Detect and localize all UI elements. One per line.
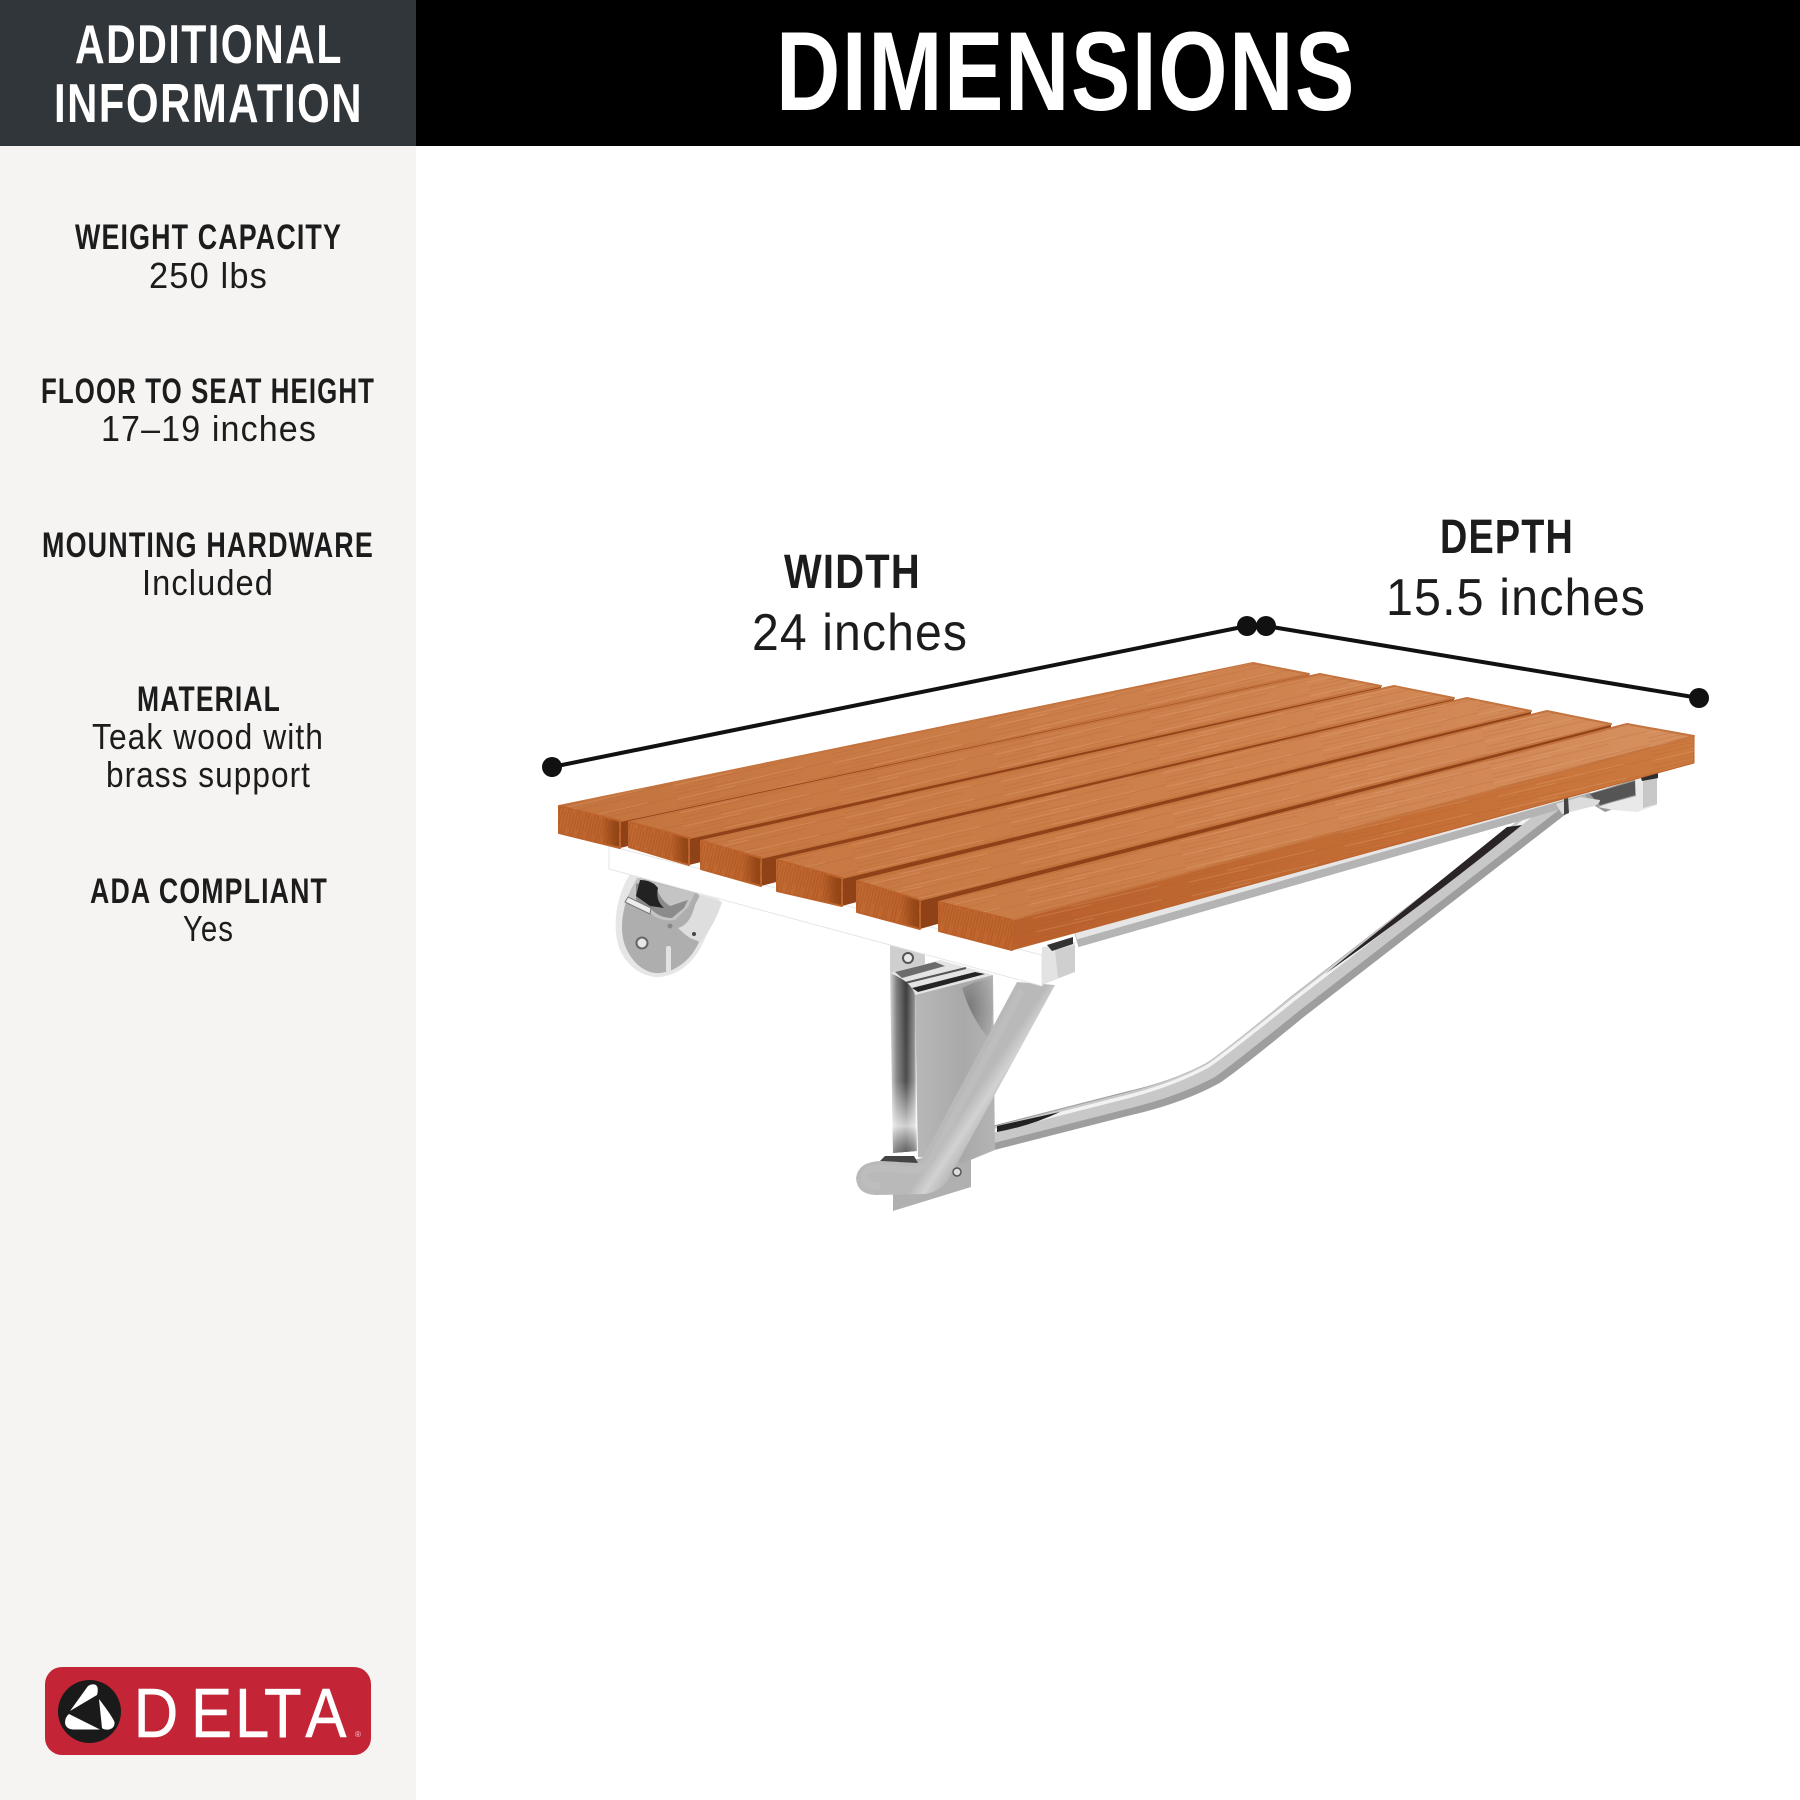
under-seat rail <box>1076 789 1590 938</box>
white seat frame <box>609 846 1075 986</box>
depth value: 15.5 inches <box>1386 569 1646 627</box>
spec: floor to seat height: 17–19 inches <box>101 408 317 449</box>
wall mount left <box>616 870 722 977</box>
teak slats <box>559 663 1694 950</box>
spec: weight capacity <box>75 218 342 296</box>
depth line <box>1256 616 1709 708</box>
bracket face <box>915 975 995 1163</box>
spec: floor to seat height <box>41 372 375 449</box>
slat 4 <box>777 698 1531 906</box>
sidebar heading: INFORMATION <box>54 72 363 134</box>
spec: mounting hardware: Included <box>142 562 274 603</box>
slat 1 <box>559 663 1309 848</box>
width line <box>542 616 1257 777</box>
slat 2 <box>629 674 1381 865</box>
far wall bracket <box>1556 773 1658 815</box>
depth label: DEPTH <box>1440 511 1574 564</box>
spec: mounting hardware <box>42 526 374 603</box>
spec: floor to seat height: FLOOR TO SEAT HEIGHT <box>41 372 375 411</box>
bracket back plate and lower tab <box>893 1150 971 1211</box>
center wall bracket <box>890 945 995 1211</box>
header bar: dimensions <box>416 0 1800 146</box>
slat 5 <box>857 711 1611 929</box>
dimension: width <box>542 546 1257 777</box>
panel: additional information sidebar <box>0 0 416 1800</box>
spec: weight capacity: 250 lbs <box>149 255 268 296</box>
product: folding teak shower seat <box>559 663 1694 1211</box>
spec: ada compliant: Yes <box>183 908 234 949</box>
bracket chrome strip <box>890 973 917 1153</box>
sidebar heading <box>0 0 416 146</box>
dimension: depth <box>1256 511 1709 708</box>
spec: material: Teak wood with <box>92 716 324 757</box>
logo: delta: ® <box>355 1730 361 1739</box>
spec: mounting hardware: MOUNTING HARDWARE <box>42 526 374 565</box>
width value: 24 inches <box>752 604 968 662</box>
chrome dark reflection <box>1325 825 1522 974</box>
spec: material: MATERIAL <box>137 680 281 719</box>
spec: ada compliant <box>90 872 328 949</box>
angled brace tube with foot <box>856 982 1055 1195</box>
spec: weight capacity: WEIGHT CAPACITY <box>75 218 342 257</box>
logo: delta <box>45 1667 371 1755</box>
spec: material: brass support <box>106 754 311 795</box>
slat 6 <box>939 724 1694 950</box>
logo: delta: DELTA <box>134 1673 346 1752</box>
width label: WIDTH <box>784 546 921 599</box>
heading: dimensions: DIMENSIONS <box>776 9 1356 134</box>
spec: material <box>92 680 324 795</box>
slat 3 <box>701 686 1454 886</box>
sidebar heading: ADDITIONAL <box>75 13 343 75</box>
long chrome support tube <box>985 781 1580 1140</box>
bracket upper fold <box>890 960 993 995</box>
spec: ada compliant: ADA COMPLIANT <box>90 872 328 911</box>
